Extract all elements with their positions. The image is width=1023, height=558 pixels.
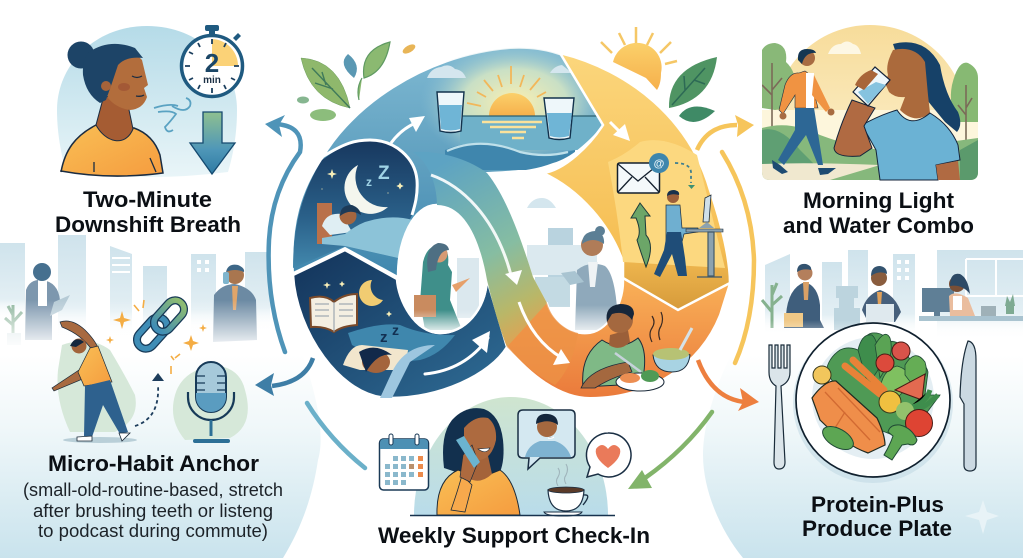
section: right hole with tablet woman: [527, 198, 617, 330]
decor: sun and leaves right: [601, 27, 717, 122]
arrow: orange to plate: [698, 360, 759, 411]
person: man at laptop: [862, 266, 901, 322]
dashed path: [675, 163, 691, 183]
icon: open book: [310, 294, 357, 332]
person: man on phone: [213, 265, 257, 342]
person walking: [772, 49, 836, 175]
icon: knife: [960, 341, 976, 471]
icon: sleep z: z: [380, 329, 388, 346]
section: top blue sunrise band: [292, 48, 603, 280]
icon: plant: [762, 283, 782, 328]
arrow: to micro-habit: [255, 358, 313, 396]
heading: morning light: and Water Combo: [783, 213, 974, 238]
swoosh: [348, 324, 455, 361]
arrow: green to weekly: [628, 412, 712, 489]
icon: small moon: [359, 280, 383, 306]
icon: crescent moon: [344, 165, 388, 214]
person at standing desk: [654, 190, 723, 277]
heading: weekly support check-in: Weekly Support Check-In: [378, 523, 650, 548]
icon: breath swirls: [154, 98, 190, 131]
icon: sparkles: [106, 311, 207, 351]
sleeping person in bed: [317, 203, 413, 258]
icon: fork: [769, 345, 790, 469]
left city scene: [0, 235, 270, 350]
section: left hole with walking woman: [402, 224, 479, 330]
ground: [762, 125, 978, 180]
heading: morning light: Morning Light: [803, 188, 955, 213]
blobs: [58, 341, 136, 432]
icon: bowl with steam: [650, 312, 692, 372]
icon: green up arrow: [631, 203, 650, 267]
heading: micro-habit anchor: Micro-Habit Anchor: [48, 451, 259, 476]
dashed arrow: [135, 385, 158, 426]
section: mid band: [413, 152, 578, 385]
decor: leaves left: [297, 42, 417, 121]
sunrise scene: [427, 48, 602, 170]
right city scene: [760, 250, 1023, 352]
heading: two-minute downshift breath: Downshift Breath: [55, 212, 241, 237]
section: night reading panel: z: [392, 322, 399, 338]
section: night moon panel: Z: [378, 163, 390, 184]
backdrop circle: [57, 26, 237, 177]
panel: micro-habit background: [0, 240, 321, 558]
text: micro-habit description: to podcast during commute): [38, 521, 268, 541]
text: micro-habit description: (small-old-routine-based, stretch: [23, 480, 283, 500]
icon: envelope: [618, 163, 660, 193]
person: standing man with folder: [784, 264, 824, 328]
arrow: white reading: [425, 338, 488, 374]
icon: at badge: @: [654, 158, 665, 170]
person with eyes closed: [61, 42, 163, 176]
icon: chain links: [133, 297, 188, 352]
icon: at badge: [649, 153, 669, 173]
person: woman with tablet: [25, 263, 70, 340]
heading: protein-plus produce plate: [802, 492, 952, 541]
icon: stopwatch 2 min: 2: [205, 48, 219, 78]
icon: water glass right: [544, 98, 574, 140]
person stretching: [52, 321, 137, 443]
arrow: yellow to morning: [697, 115, 754, 150]
icon: heart bubble: [586, 433, 631, 477]
panel: protein plate background: [703, 240, 1023, 558]
figure: two-minute breath illustration: [57, 25, 242, 177]
person: woman at desk: [922, 274, 975, 320]
icon: water glass left: [437, 92, 464, 132]
broccoli: [884, 425, 917, 460]
figure: protein plus produce plate: [769, 323, 976, 483]
arrow: light blue segment: [307, 403, 365, 468]
icon: plate with salmon: [616, 370, 664, 391]
section: night moon panel: [293, 140, 417, 268]
arrow: white to sunrise: [391, 122, 418, 143]
icon: calendar: [380, 434, 428, 490]
heading: protein-plus produce plate: Protein-Plus: [811, 492, 944, 517]
icon: microphone: [188, 362, 234, 441]
icon: video call bubble: [518, 410, 575, 469]
decor: sparkle: [965, 500, 999, 534]
section: orange meal panel: [505, 278, 730, 398]
section: yellow focus panel: [543, 53, 730, 310]
figure: micro-habit anchor illustrations: [52, 297, 248, 443]
heading: two-minute downshift breath: Two-Minute: [83, 187, 212, 212]
person eating: [581, 304, 645, 388]
plate: [793, 323, 953, 483]
desk: [919, 316, 1023, 321]
person on phone: [437, 408, 520, 515]
heading: two-minute downshift breath: [55, 187, 241, 237]
icon: water cooler: [834, 286, 860, 330]
icon: stopwatch 2 min: min: [203, 75, 221, 86]
sleeping reader: [343, 345, 435, 398]
figure: weekly support check-in: [380, 397, 631, 516]
icon: stopwatch 2 min: [182, 25, 242, 96]
greens: [826, 333, 940, 440]
icon: coffee cup: [544, 464, 588, 516]
tomatoes and carrot: [876, 354, 894, 372]
person drinking water: [834, 42, 960, 180]
trees: [762, 43, 794, 126]
heading: protein-plus produce plate: Produce Plate: [802, 516, 952, 541]
heading: morning light: [783, 188, 974, 238]
section: night reading panel: [293, 250, 507, 398]
icon: down arrow: [190, 112, 235, 174]
icon: potted plant: [5, 305, 22, 335]
salmon: [812, 381, 885, 453]
arrow: to breath: [265, 115, 301, 352]
text: micro-habit description: [23, 480, 283, 541]
arrow: yellow segment: [722, 152, 754, 363]
text: micro-habit description: after brushing teeth or listeng: [33, 501, 273, 521]
icon: sleep z: z: [366, 175, 372, 189]
central loop: [292, 41, 730, 398]
figure: morning light and water: [762, 25, 978, 180]
